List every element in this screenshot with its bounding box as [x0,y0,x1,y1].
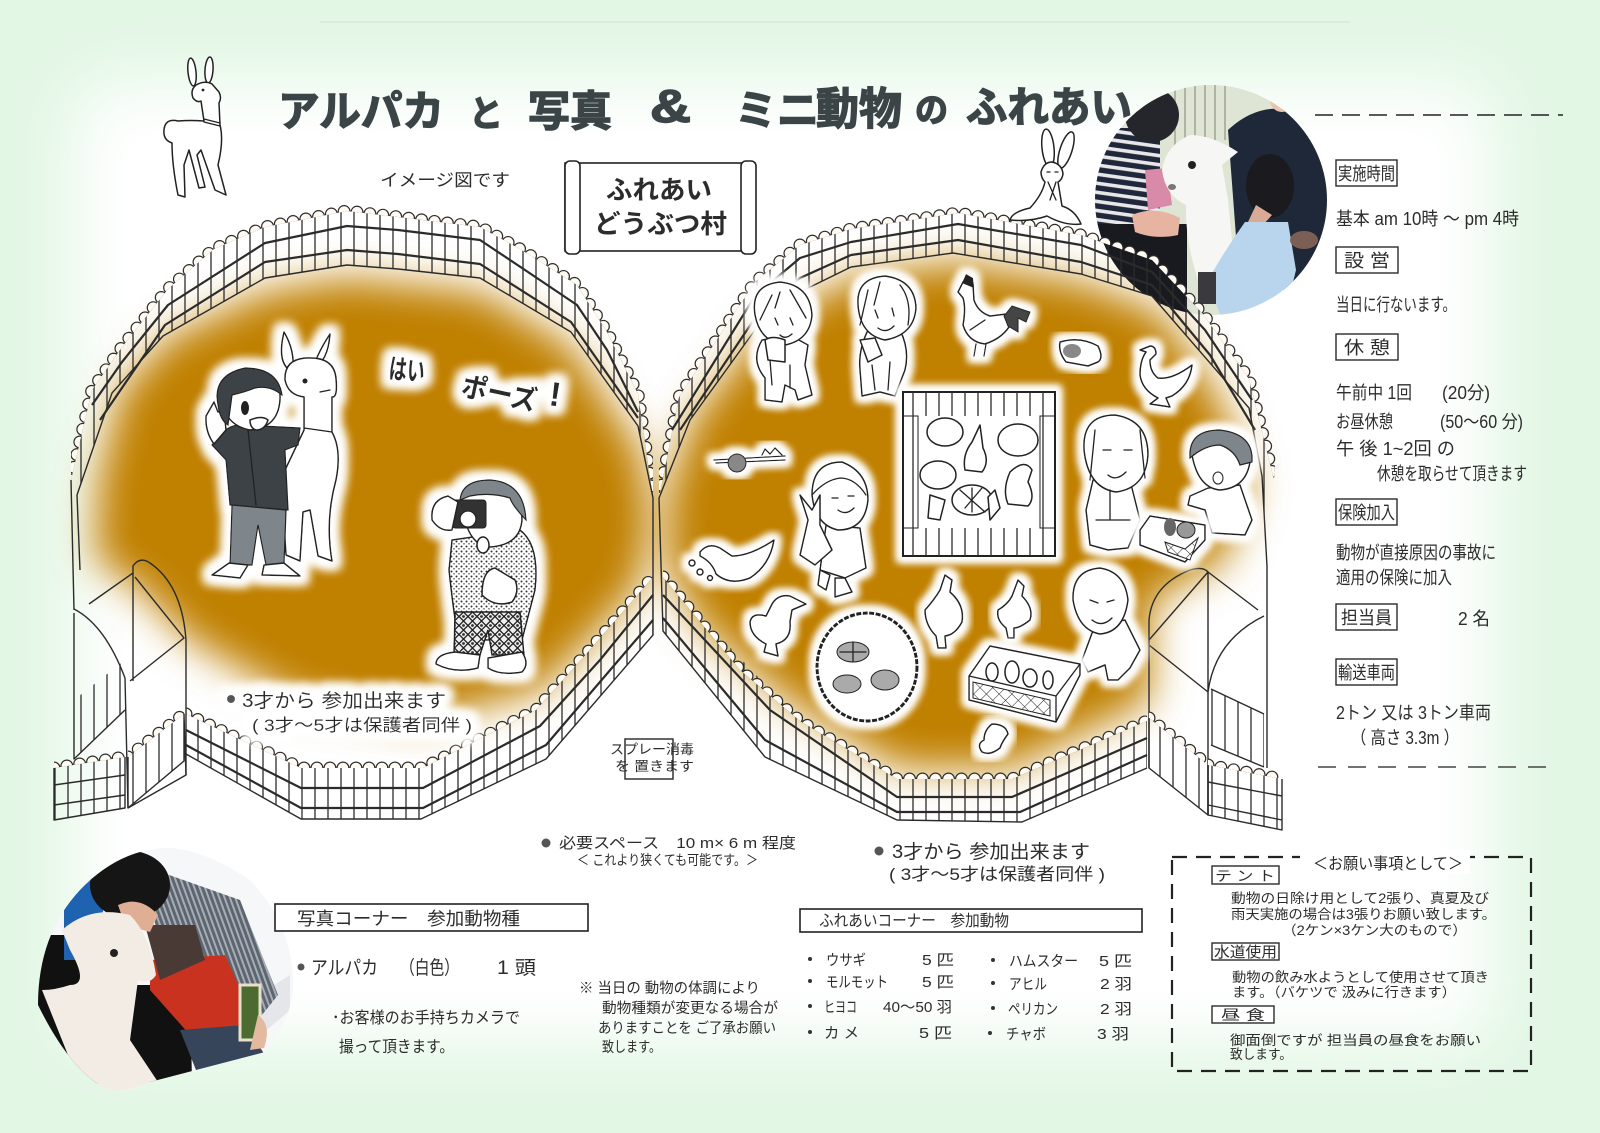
figure: crouching child [1073,568,1140,680]
title: & [650,80,691,132]
title: の [915,92,948,130]
left pen age note: ( 3才～5才は保護者同伴 ) [252,716,472,735]
sign: ふれあいどうぶつ村 [565,161,756,254]
panel: petting corner: ハムスター [1009,953,1078,970]
turtle enclosure [817,613,917,721]
icon: hen 1 [925,575,962,648]
right pen age note: ( 3才～5才は保護者同伴 ) [889,865,1105,884]
panel: requests: 昼 食 [1221,1007,1265,1023]
figure: girl with rabbit [800,462,868,597]
sign: ふれあいどうぶつ村: ふれあい [606,175,712,205]
speech text: はい ポーズ: ! [547,375,563,414]
right pen fence [659,213,1274,822]
right pen age note: 3才から 参加出来ます [892,841,1090,863]
icon: guinea pig [1060,340,1101,366]
image caption: イメージ図です [380,171,510,190]
panel: operating info: 午前中 1回 [1336,383,1412,403]
panel: operating info: 基本 am 10時 ～ pm 4時 [1336,209,1519,229]
left pen fence [71,211,653,819]
panel: operating info: 適用の保険に加入 [1336,568,1452,588]
spray note: スプレー消毒 [610,742,694,757]
panel: photo corner: 撮って頂きます。 [339,1038,454,1056]
hamster crate [1140,516,1205,562]
panel: petting corner: モルモット [826,974,888,991]
white sheet area [75,84,1490,1042]
panel: requests: 雨天実施の場合は3張りお願い致します。 [1231,907,1496,922]
icon: turtle on branch [714,448,785,472]
note: animal condition: ありますことを ご了承お願い [598,1020,776,1037]
panel: requests [1172,850,1531,1071]
panel: requests: ます。（バケツで 汲みに行きます） [1232,985,1456,1000]
panel: requests: テ ン ト [1215,868,1275,884]
panel: operating info: 午 後 1~2回 の [1336,439,1455,459]
panel: petting corner: 5 匹 [1099,953,1132,970]
icon: standing alpaca top left [164,57,226,197]
left pen age note: 3才から 参加出来ます [242,690,446,712]
panel: operating info: 休憩を取らせて頂きます [1377,464,1527,484]
panel: photo corner: （白色） [400,957,459,979]
panel: petting corner [800,909,1142,1043]
figure: crouching boy [1188,430,1252,535]
left pen figures: photographer [432,480,536,673]
note: animal condition: 致します。 [602,1039,661,1056]
spray note [610,739,694,779]
title: 写真 [528,88,612,135]
panel: operating info: 保険加入 [1338,503,1395,523]
photo: person hugging alpaca [38,848,292,1090]
title: アルパカ [278,88,444,135]
left gate [54,560,186,820]
panel: operating info: お昼休憩 [1336,412,1393,432]
icon: goose [1140,346,1192,407]
panel: petting corner: カ メ [824,1025,859,1042]
panel: operating info [1315,115,1563,767]
panel: operating info: 担当員 [1341,608,1392,628]
note: animal condition: 動物種類が変更なる場合が [602,1000,779,1017]
icon: duck [750,596,806,656]
panel: photo corner [275,904,588,1056]
panel: operating info: （ 高さ 3.3m ） [1351,728,1459,748]
panel: requests: 動物の飲み水ようとして使用させて頂き [1232,969,1489,985]
panel: operating info: 実施時間 [1338,164,1395,184]
right gate [1149,566,1282,830]
title: ミニ [735,87,819,134]
panel: petting corner: 5 匹 [919,1025,952,1042]
figure: kid holding rabbit 1 [754,282,812,402]
left pen age note [227,690,472,735]
panel: operating info: (50～60 分) [1440,412,1523,432]
icon: rabbit on fence [1010,128,1081,224]
panel: photo corner: 1 頭 [497,958,536,979]
panel: requests: ＜お願い事項として＞ [1313,855,1463,873]
panel: petting corner: ウサギ [826,952,866,969]
photo: family with alpaca [1090,80,1330,320]
panel: petting corner: ふれあいコーナー 参加動物 [819,912,1009,930]
panel: petting corner: アヒル [1009,976,1047,993]
space requirement note [542,835,796,868]
spray note: を 置きます [615,759,694,774]
title [278,80,1132,135]
panel: photo corner: ･お客様のお手持ちカメラで [332,1009,520,1027]
chick crate [969,646,1080,722]
panel: requests: 致します。 [1230,1047,1292,1062]
panel: operating info: 輸送車両 [1338,663,1395,683]
sign: ふれあいどうぶつ村: どうぶつ村 [594,209,727,239]
brown ground: right pen [665,262,1250,768]
left pen figures: boy and alpaca [206,332,338,578]
brown ground: left pen [95,278,652,722]
panel: requests: 御面倒ですが 担当員の昼食をお願い [1230,1033,1481,1048]
panel: petting corner: 5 匹 [922,974,954,991]
speech text: はい ポーズ: ポーズ [459,370,540,417]
icon: rooster [958,274,1030,356]
title: ふれあい [966,84,1132,131]
panel: petting corner: 2 羽 [1100,1001,1132,1018]
panel: operating info: (20分) [1442,383,1490,403]
panel: operating info: 2トン 又は 3トン車両 [1336,703,1491,723]
title: 動物 [816,85,902,134]
title: と [469,93,503,134]
panel: operating info: 動物が直接原因の事故に [1336,543,1496,563]
icon: swimming duck [689,540,774,581]
note: animal condition: ※ 当日の 動物の体調により [579,980,760,997]
icon: hen 2 [998,580,1031,638]
small animals pen [903,392,1055,556]
panel: photo corner: アルパカ [311,958,378,979]
panel: petting corner: 40～50 羽 [883,999,952,1016]
space requirement note: ＜ これより狭くても可能です。＞ [577,852,758,868]
figure: kneeling woman [1084,415,1148,550]
panel: petting corner: チャボ [1006,1026,1046,1043]
note: animal condition [579,980,779,1056]
icon: chick [979,724,1008,753]
panel: photo corner: 写真コーナー 参加動物種 [297,909,520,929]
panel: operating info: 当日に行ないます。 [1336,295,1456,315]
panel: petting corner: 3 羽 [1097,1026,1129,1043]
panel: operating info: 休 憩 [1344,338,1390,358]
speech text: はい ポーズ [387,353,563,417]
space requirement note: 必要スペース 10 m× 6 m 程度 [559,835,796,852]
panel: operating info: 設 営 [1344,251,1390,271]
panel: petting corner: 5 匹 [922,952,954,969]
panel: operating info: 2 名 [1458,609,1490,629]
right pen age note [874,841,1105,884]
panel: requests: 水道使用 [1214,944,1277,961]
panel: petting corner: ヒヨコ [824,999,857,1016]
panel: requests: （2ケン×3ケン大のもので） [1282,923,1467,938]
panel: requests: 動物の日除け用として2張り、真夏及び [1231,891,1490,906]
panel: petting corner: ペリカン [1008,1001,1058,1018]
panel: petting corner: 2 羽 [1100,976,1132,993]
figure: kid holding rabbit 2 [858,276,916,396]
speech text: はい ポーズ: はい [387,353,426,388]
